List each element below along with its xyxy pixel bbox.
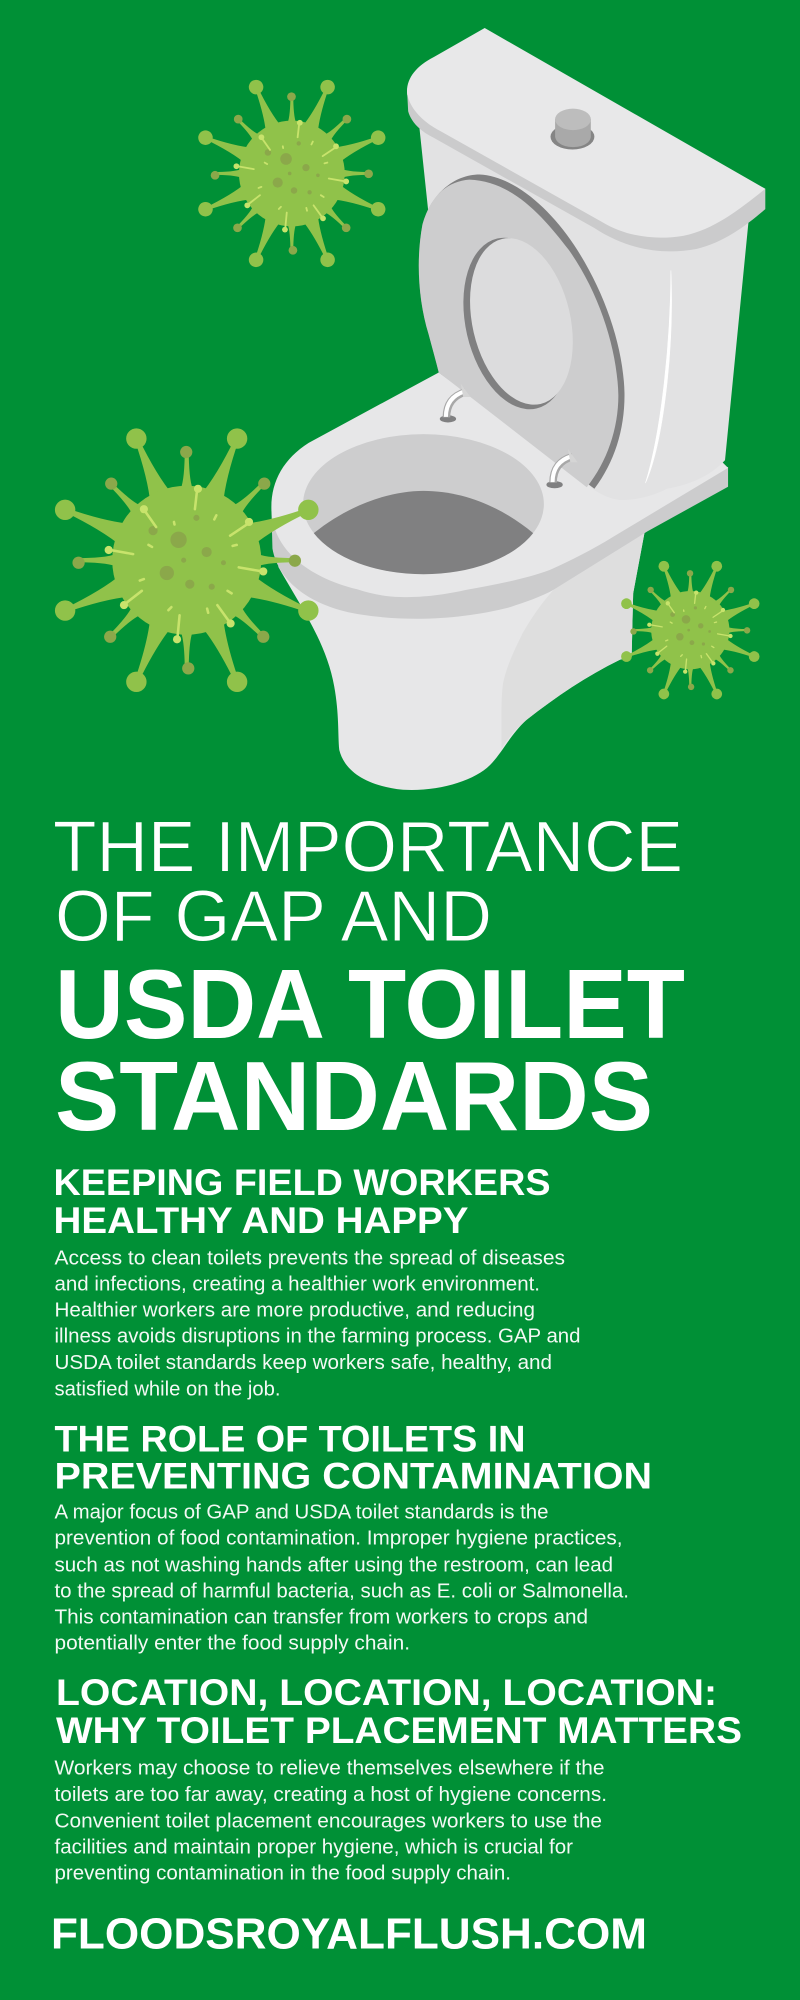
right hinge (546, 449, 578, 488)
section 3 body text (54, 1758, 607, 1884)
cistern tank body (419, 128, 749, 500)
section 3 heading: WHY TOILET PLACEMENT MATTERS (56, 1709, 742, 1751)
section 2 body text: prevention of food contamination. Improper hygiene practices, (54, 1528, 622, 1550)
tank lid side (407, 92, 765, 251)
bowl rim side (271, 467, 728, 619)
section 2 body text: such as not washing hands after using the restroom, can lead (54, 1554, 613, 1576)
illustration: toilet with viruses (51, 28, 765, 790)
footer website: FLOODSROYALFLUSH.COM (51, 1910, 647, 1958)
section 3 body text: Workers may choose to relieve themselves elsewhere if the (54, 1758, 604, 1780)
left hinge (440, 384, 470, 422)
title: THE IMPORTANCE (53, 808, 683, 888)
bowl interior (303, 434, 544, 574)
toilet (271, 28, 765, 790)
title: USDA TOILET (55, 949, 685, 1059)
toilet pedestal (278, 531, 645, 790)
bowl rim top (271, 357, 728, 597)
section 1 body text: Access to clean toilets prevents the spread of diseases (54, 1248, 565, 1270)
seat opening (455, 228, 588, 415)
section 2 body text: to the spread of harmful bacteria, such as E. coli or Salmonella. (54, 1580, 629, 1602)
pedestal shading (501, 531, 645, 749)
section 2 body text (54, 1502, 629, 1654)
raised seat (419, 180, 618, 487)
section 3 body text: Convenient toilet placement encourages workers to use the (54, 1810, 602, 1832)
section 1 body text: USDA toilet standards keep workers safe, healthy, and (54, 1352, 552, 1374)
seat opening shadow (447, 227, 586, 420)
bowl water (314, 491, 533, 574)
section 1 body text: illness avoids disruptions in the farming process. GAP and (54, 1326, 580, 1348)
raised seat rim (419, 174, 625, 489)
section 1 body text: satisfied while on the job. (54, 1378, 280, 1400)
section 3 heading (56, 1671, 742, 1751)
section 1 heading (54, 1161, 550, 1241)
title: OF GAP AND (55, 877, 492, 957)
section 1 heading: KEEPING FIELD WORKERS (54, 1161, 550, 1203)
virus: top (195, 77, 388, 270)
section 2 body text: This contamination can transfer from workers to crops and (54, 1606, 588, 1628)
section 3 body text: toilets are too far away, creating a host of hygiene concerns. (54, 1784, 607, 1806)
section 3 heading: LOCATION, LOCATION, LOCATION: (56, 1671, 717, 1713)
section 2 body text: potentially enter the food supply chain. (54, 1632, 410, 1654)
virus: small right (619, 559, 762, 701)
tank lid top (407, 28, 765, 238)
section 2 heading (54, 1418, 652, 1496)
flush button (551, 109, 594, 149)
title: STANDARDS (55, 1041, 653, 1151)
title (53, 808, 685, 1151)
virus: large left (51, 424, 322, 696)
section 3 body text: facilities and maintain proper hygiene, which is crucial for (54, 1836, 573, 1858)
section 1 body text (54, 1248, 580, 1400)
section 3 body text: preventing contamination in the food supply chain. (54, 1862, 511, 1884)
tank highlight (645, 270, 672, 483)
section 2 body text: A major focus of GAP and USDA toilet standards is the (54, 1502, 548, 1524)
section 1 heading: HEALTHY AND HAPPY (54, 1199, 468, 1241)
section 1 body text: Healthier workers are more productive, and reducing (54, 1300, 535, 1322)
section 2 heading: PREVENTING CONTAMINATION (54, 1454, 652, 1496)
section 1 body text: and infections, creating a healthier work environment. (54, 1274, 540, 1296)
section 2 heading: THE ROLE OF TOILETS IN (54, 1418, 526, 1460)
